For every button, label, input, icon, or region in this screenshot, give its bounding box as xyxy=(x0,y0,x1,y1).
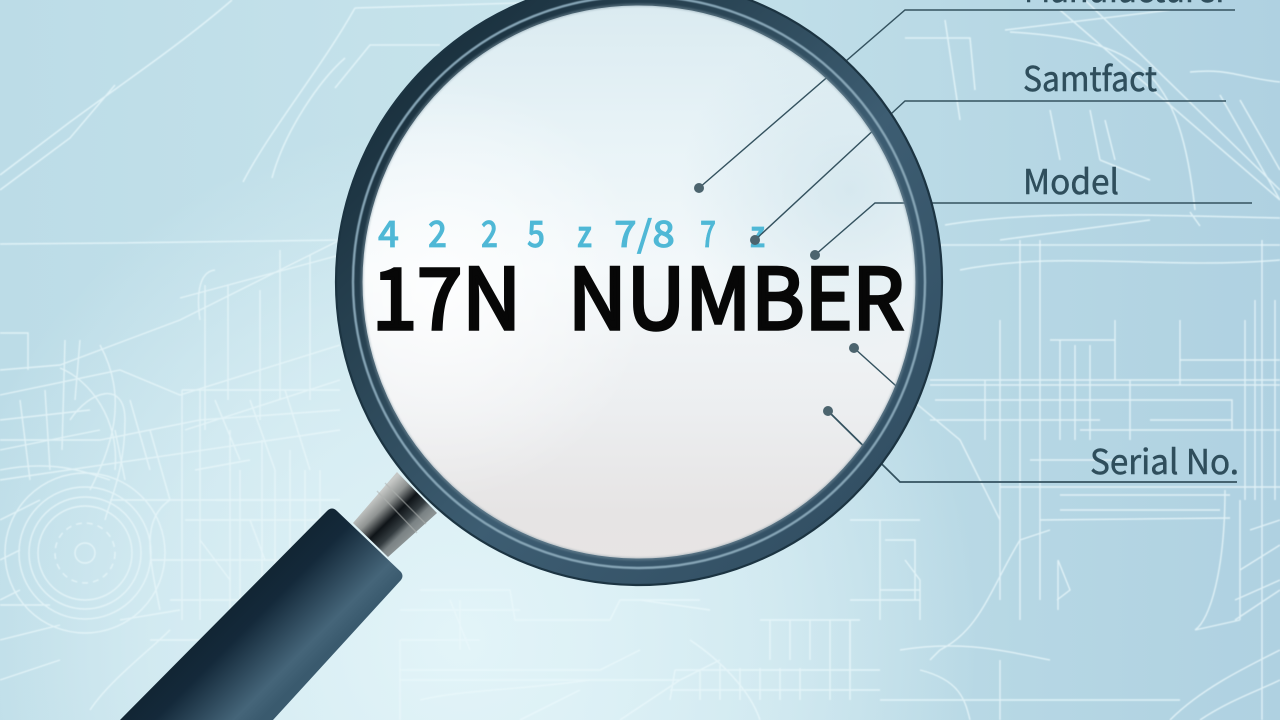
leader: model xyxy=(815,203,1252,255)
blueprint wheel xyxy=(5,473,165,633)
cyan digit row: 2 xyxy=(428,206,447,258)
label: model: Model xyxy=(1023,155,1119,204)
ferrule xyxy=(353,472,437,557)
cyan digit row: z xyxy=(577,206,592,258)
blueprint sketch: left machine xyxy=(0,240,340,710)
blueprint sketch: upper outline xyxy=(0,0,1280,270)
cyan digit row: 2 xyxy=(481,206,498,258)
lens ring xyxy=(336,0,942,585)
cyan digit row: 7 xyxy=(700,206,716,258)
cyan digit row xyxy=(378,206,765,258)
cyan digit row: 4 xyxy=(378,206,399,258)
leader: manufacturer xyxy=(699,10,1235,188)
shadow line under lens xyxy=(562,649,830,651)
callout labels xyxy=(1023,0,1239,484)
blueprint sketch: lower machine xyxy=(400,520,1180,720)
main heading: NUMBER xyxy=(568,233,904,354)
leader: serial xyxy=(828,411,1237,482)
cyan digit row: z xyxy=(750,206,765,258)
magnifying glass handle xyxy=(120,472,437,720)
main heading: 17N xyxy=(372,233,521,354)
magnifying lens xyxy=(349,0,929,572)
leader: inner xyxy=(854,348,905,394)
cyan digit row: 5 xyxy=(527,206,545,258)
handle grip xyxy=(120,508,402,720)
cyan digit row: 7/8 xyxy=(614,206,675,258)
leader: samtfact xyxy=(755,101,1226,240)
blueprint sketch: right machine xyxy=(900,240,1280,720)
callout leader lines xyxy=(699,10,1252,482)
label: serial no: Serial No. xyxy=(1090,435,1239,484)
label: samtfact: Samtfact xyxy=(1023,52,1157,101)
callout dots xyxy=(694,183,859,416)
main heading xyxy=(372,233,904,354)
